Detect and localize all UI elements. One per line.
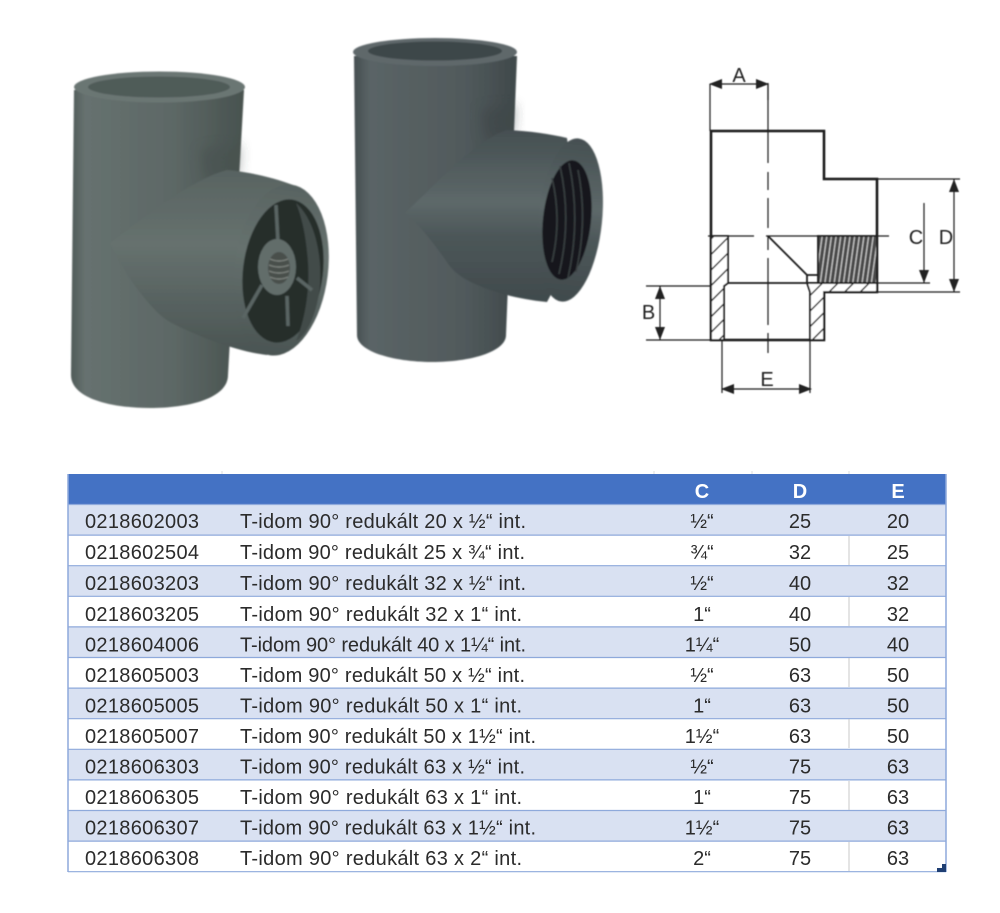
row 0218603205: 32	[887, 604, 909, 626]
grey inner wall	[296, 203, 320, 341]
row 0218606308	[68, 841, 946, 872]
row 0218603205: 40	[789, 604, 811, 626]
right wall hatch	[807, 283, 877, 340]
dimension A	[709, 65, 769, 131]
row 0218606305	[68, 780, 946, 810]
row 0218605005	[68, 688, 946, 719]
row 0218606303: ½“	[690, 756, 714, 778]
dimension E	[721, 340, 812, 394]
row 0218605005: 63	[789, 696, 811, 718]
row 0218605007: 1½“	[685, 726, 719, 748]
row 0218606308: T-idom 90° redukált 63 x 2“ int.	[240, 848, 522, 870]
row 0218602003: T-idom 90° redukált 20 x ½“ int.	[240, 511, 526, 533]
row 0218606307: T-idom 90° redukált 63 x 1½“ int.	[240, 818, 536, 840]
selection handle	[937, 864, 946, 872]
branch face rim	[530, 135, 610, 305]
row 0218606303: T-idom 90° redukált 63 x ½“ int.	[240, 756, 525, 778]
inner bore lines	[728, 236, 818, 283]
row 0218605003	[68, 658, 946, 688]
header row: C	[695, 481, 709, 503]
header row: D	[793, 481, 807, 503]
row 0218606307: 0218606307	[85, 818, 199, 840]
row 0218606305: 1“	[693, 787, 711, 809]
row 0218603203: T-idom 90° redukált 32 x ½“ int.	[240, 573, 526, 595]
dimension C	[877, 203, 930, 283]
row 0218604006: 0218604006	[85, 634, 199, 656]
row 0218603203: 40	[789, 573, 811, 595]
hub	[258, 239, 296, 295]
top rim	[353, 38, 517, 66]
threaded opening	[537, 158, 597, 282]
row 0218606307: 75	[789, 818, 811, 840]
row 0218602003: 0218602003	[85, 511, 199, 533]
row 0218605005: 50	[887, 696, 909, 718]
header row: E	[891, 481, 905, 503]
row 0218605007: 63	[789, 726, 811, 748]
top opening	[88, 76, 230, 98]
row 0218605003: ½“	[690, 665, 714, 687]
row 0218606307: 1½“	[685, 818, 719, 840]
thread section	[818, 236, 877, 283]
photo: reducing tee with small threaded outlet	[71, 72, 338, 408]
threaded bore	[268, 252, 290, 284]
top opening	[368, 42, 502, 60]
row 0218606303	[68, 749, 946, 780]
row 0218606303: 0218606303	[85, 756, 199, 778]
row 0218602003	[68, 504, 946, 535]
row 0218605007: T-idom 90° redukált 50 x 1½“ int.	[240, 726, 536, 748]
row 0218602504: T-idom 90° redukált 25 x ¾“ int.	[240, 542, 525, 564]
photo: reducing tee with large threaded outlet	[353, 38, 610, 362]
dimension A: A	[732, 65, 746, 87]
row 0218606305: 63	[887, 787, 909, 809]
row 0218603203: ½“	[690, 573, 714, 595]
row 0218602504: 0218602504	[85, 542, 199, 564]
row 0218605005: 1“	[693, 696, 711, 718]
dimension C: C	[909, 227, 923, 249]
ribs	[243, 205, 312, 326]
row 0218605007	[68, 719, 946, 749]
row 0218605003: 50	[887, 665, 909, 687]
row 0218602504: 25	[887, 542, 909, 564]
side branch	[110, 170, 300, 355]
dimension B	[642, 286, 711, 340]
row 0218604006	[68, 627, 946, 658]
row 0218606308: 63	[887, 848, 909, 870]
row 0218602003: 25	[789, 511, 811, 533]
junction shadow above branch	[200, 145, 240, 180]
dimension D	[877, 179, 960, 292]
row 0218603205	[68, 596, 946, 627]
main pipe body	[71, 90, 244, 408]
row 0218604006: T-idom 90° redukált 40 x 1¼“ int.	[240, 634, 526, 656]
row 0218603205: T-idom 90° redukált 32 x 1“ int.	[240, 604, 522, 626]
table	[68, 471, 946, 872]
thread ridges	[552, 163, 583, 278]
row 0218605007: 50	[887, 726, 909, 748]
row 0218603203: 32	[887, 573, 909, 595]
branch face rim	[224, 179, 338, 361]
technical section diagram	[642, 65, 960, 394]
junction shadow above branch	[480, 105, 515, 140]
section line	[708, 235, 889, 237]
header row	[68, 474, 946, 504]
dimension B: B	[642, 302, 655, 324]
row 0218604006: 50	[789, 634, 811, 656]
row 0218606308: 2“	[693, 848, 711, 870]
row 0218605005: T-idom 90° redukált 50 x 1“ int.	[240, 696, 522, 718]
row 0218602003: 20	[887, 511, 909, 533]
row 0218602504: ¾“	[690, 542, 714, 564]
row 0218606303: 63	[887, 756, 909, 778]
row 0218603203: 0218603203	[85, 573, 199, 595]
centre line	[767, 83, 769, 353]
row 0218602003: ½“	[690, 511, 714, 533]
row 0218604006: 1¼“	[685, 634, 719, 656]
dimension E: E	[760, 369, 774, 391]
row 0218606303: 75	[789, 756, 811, 778]
row 0218606305: 0218606305	[85, 787, 199, 809]
row 0218605007: 0218605007	[85, 726, 199, 748]
row 0218603205: 0218603205	[85, 604, 199, 626]
row 0218606308: 0218606308	[85, 848, 199, 870]
outer outline	[711, 131, 877, 340]
row 0218605003: 63	[789, 665, 811, 687]
row 0218606305: 75	[789, 787, 811, 809]
dimension D: D	[939, 227, 953, 249]
row 0218604006: 40	[887, 634, 909, 656]
main pipe body	[354, 56, 517, 362]
row 0218602504	[68, 535, 946, 566]
row 0218605005: 0218605005	[85, 696, 199, 718]
row 0218606307: 63	[887, 818, 909, 840]
row 0218605003: 0218605003	[85, 665, 199, 687]
branch face recess	[235, 195, 331, 347]
row 0218606308: 75	[789, 848, 811, 870]
row 0218606305: T-idom 90° redukált 63 x 1“ int.	[240, 787, 522, 809]
row 0218606307	[68, 810, 946, 841]
row 0218602504: 32	[789, 542, 811, 564]
side branch	[405, 130, 580, 302]
top rim	[74, 72, 245, 102]
left wall hatch	[711, 236, 728, 340]
row 0218605003: T-idom 90° redukált 50 x ½“ int.	[240, 665, 525, 687]
row 0218603205: 1“	[693, 604, 711, 626]
row 0218603203	[68, 566, 946, 596]
